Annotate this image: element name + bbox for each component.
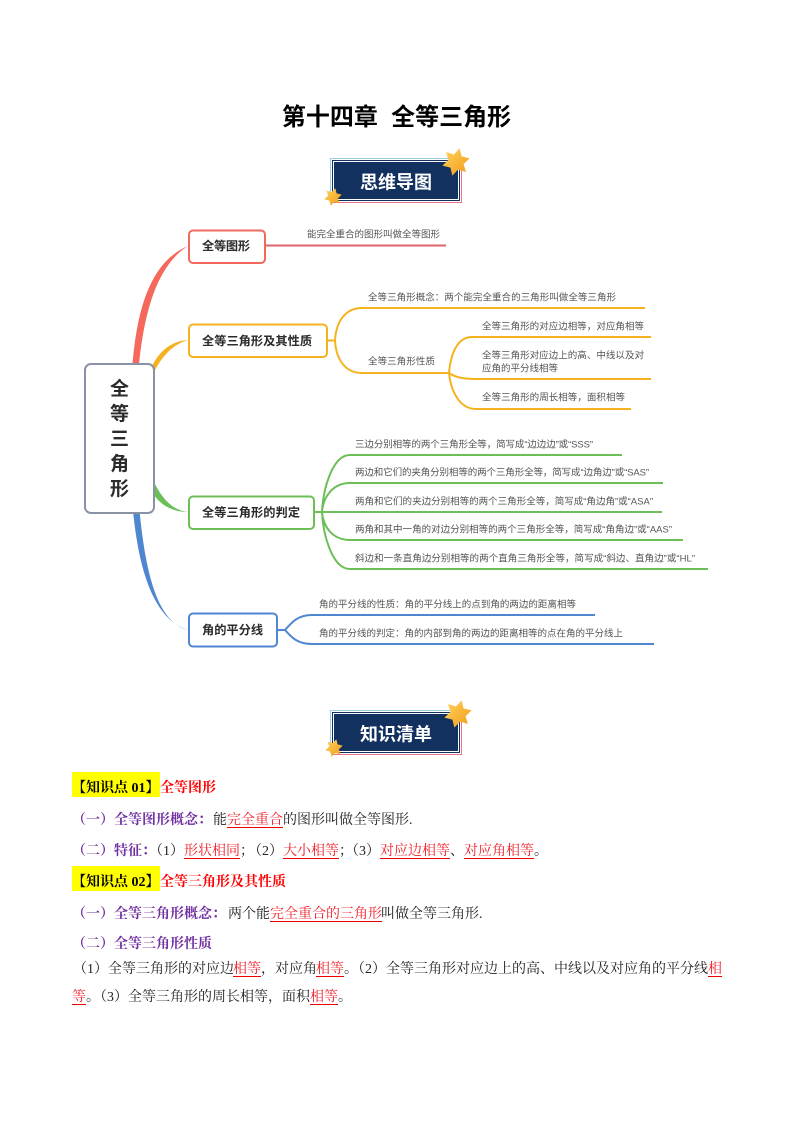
text: 特征: 形状相同 [184,844,240,859]
text: 全等图形概念 [72,812,412,828]
branch: 全等三角形及其性质: 全等三角形概念：两个能完全重合的三角形叫做全等三角形 [368,292,616,304]
branch: 全等三角形及其性质: 全等三角形性质 [368,356,435,368]
text: 特征: 大小相等 [283,844,339,859]
branch: 全等三角形及其性质: 全等三角形对应边上的高、中线以及对 [482,350,644,362]
trunk: blue [133,511,188,630]
text: 性质 line 1 [73,960,722,977]
heading: 知识点 02: 全等三角形及其性质 [160,875,286,890]
central node: 全 [110,377,129,400]
branch: 全等三角形及其性质: 全等三角形及其性质 [202,333,312,348]
branch: 全等三角形的判定: 三边分别相等的两个三角形全等，简写成“边边边”或“SSS” [355,438,593,450]
text: 特征 [72,842,548,859]
text: 性质 line 1: 相 [708,962,722,977]
text: 特征: （2） [248,844,283,859]
central node: 三 [110,429,129,450]
branch: 全等三角形的判定: 全等三角形的判定 [202,504,300,520]
branch: 全等三角形的判定: 两角和其中一角的对边分别相等的两个三角形全等，简写成“角角边”或“AAS” [355,524,672,536]
badge: 思维导图 [324,148,470,206]
central node [85,364,154,513]
text: 性质 line 1: （1）全等三角形的对应边 [73,962,234,977]
text: 性质 line 1: 相等 [316,962,344,977]
heading: 知识点 02 [72,866,286,891]
text: 特征: ： [142,844,156,859]
text: 特征: ； [339,844,353,859]
branch: 角的平分线: 角的平分线的判定：角的内部到角的两边的距离相等的点在角的平分线上 [319,628,623,640]
text: 全等图形概念: 能 [213,813,227,828]
branch: 全等三角形的判定: 两角和它们的夹边分别相等的两个三角形全等，简写成“角边角”或“ASA” [355,496,653,508]
heading: 知识点 01 [72,772,216,797]
text: 特征: （3） [345,844,380,859]
heading: 知识点 01: 全等图形 [160,781,216,796]
text: 性质 line 2: 。（3）全等三角形的周长相等，面积 [86,990,310,1005]
branch: 角的平分线: 角的平分线的性质：角的平分线上的点到角的两边的距离相等 [319,598,576,610]
title: 第十四章 全等三角形 [282,104,511,131]
text: 特征: （1） [149,844,184,859]
branch: 角的平分线: 角的平分线 [202,622,263,637]
branch: 全等图形: 能完全重合的图形叫做全等图形 [307,228,440,240]
text: 特征: 。 [534,844,548,859]
heading: 知识点 01: 【知识点 01】 [72,781,160,796]
text: 全等图形概念: 的图形叫做全等图形. [283,813,412,828]
text: 特征: （二）特征 [72,844,142,859]
text: 全等三角形概念: 两个能 [228,907,270,922]
trunk: yellow [152,340,188,370]
text: 特征: 对应边相等 [380,844,450,859]
central node: 形 [110,478,129,500]
central node: 等 [110,403,129,425]
branch: 全等图形 [189,228,446,263]
badge: 知识清单 [325,700,472,757]
text: 特征: 对应角相等 [464,844,534,859]
branch: 全等三角形及其性质 [189,292,651,409]
branch: 角的平分线 [189,598,654,646]
trunk: green [152,478,188,512]
branch: 全等三角形的判定: 斜边和一条直角边分别相等的两个直角三角形全等，简写成“斜边、直角边”或“HL” [355,552,695,564]
text: 全等三角形概念: 叫做全等三角形. [381,907,482,922]
branch: 全等三角形的判定: 两边和它们的夹角分别相等的两个三角形全等，简写成“边角边”或“SAS” [355,466,649,478]
mind map [85,228,708,646]
branch: 全等三角形及其性质: 应角的平分线相等 [482,362,558,374]
central node: 角 [110,452,129,475]
text: 性质 line 2: 。 [338,990,352,1005]
text: 性质 line 2: 相等 [310,990,338,1005]
heading: 知识点 02: 【知识点 02】 [72,875,160,890]
text: 性质 line 2: 等 [72,990,86,1005]
text: 全等图形概念: （一）全等图形概念： [72,813,212,828]
branch: 全等三角形及其性质: 全等三角形的对应边相等，对应角相等 [482,320,644,332]
text: 性质 line 1: 。（2）全等三角形对应边上的高、中线以及对应角的平分线 [344,962,708,977]
badge: 知识清单: 知识清单 [360,724,432,744]
text: 特征: ； [240,844,254,859]
text: 全等三角形概念 [72,906,482,922]
text: 性质 line 1: ，对应角 [261,962,317,977]
branch: 全等三角形及其性质: 全等三角形的周长相等，面积相等 [482,392,625,404]
heading: 全等三角形性质: （二）全等三角形性质 [72,937,212,952]
badge: 思维导图: 思维导图 [360,172,432,192]
trunk: red [132,246,188,365]
branch: 全等图形: 全等图形 [202,238,250,253]
text: 特征: 、 [450,844,464,859]
text: 性质 line 1: 相等 [233,962,261,977]
text: 全等图形概念: 完全重合 [227,813,283,828]
text: 全等三角形概念: （一）全等三角形概念： [72,907,226,922]
text: 全等三角形概念: 完全重合的三角形 [270,907,382,922]
branch: 全等三角形的判定 [189,438,708,569]
